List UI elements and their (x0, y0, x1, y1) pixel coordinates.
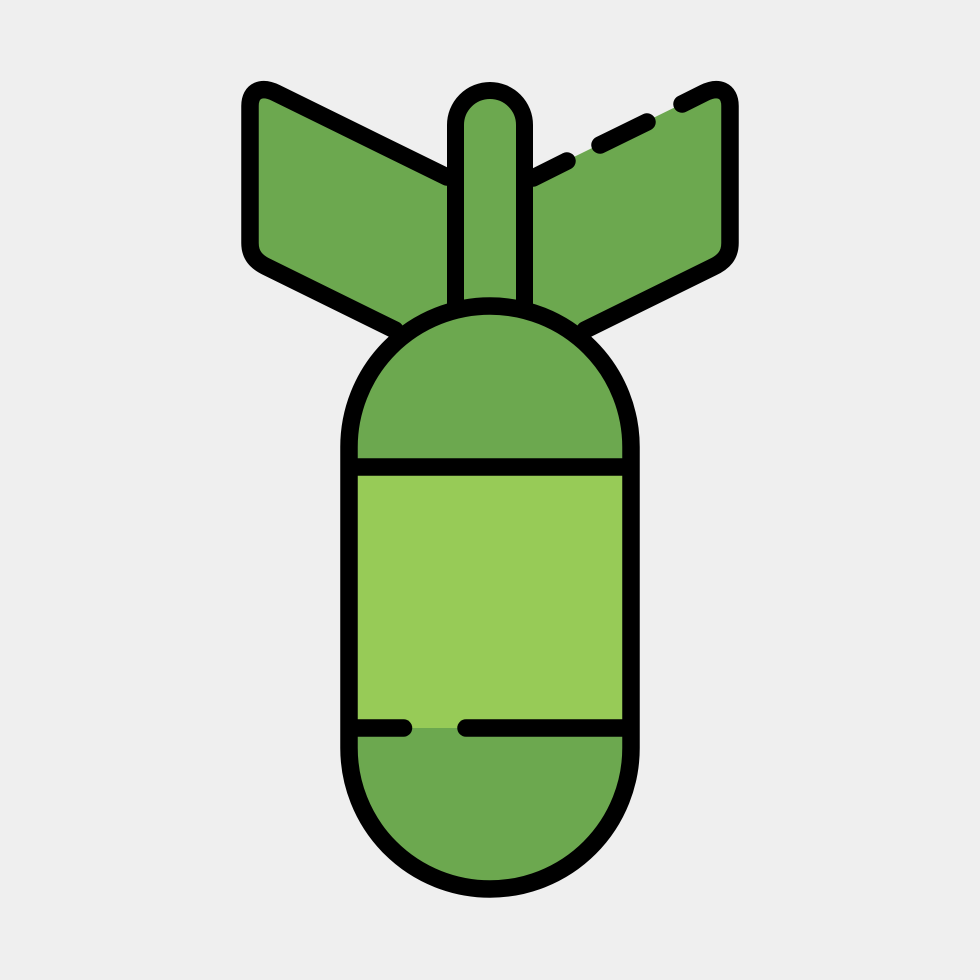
left tail fin (250, 90, 455, 330)
upper band line (350, 458, 630, 476)
bomb body (349, 306, 631, 889)
lower band line, broken (350, 719, 630, 737)
right tail fin (525, 90, 730, 330)
centre tail stem (456, 90, 524, 310)
